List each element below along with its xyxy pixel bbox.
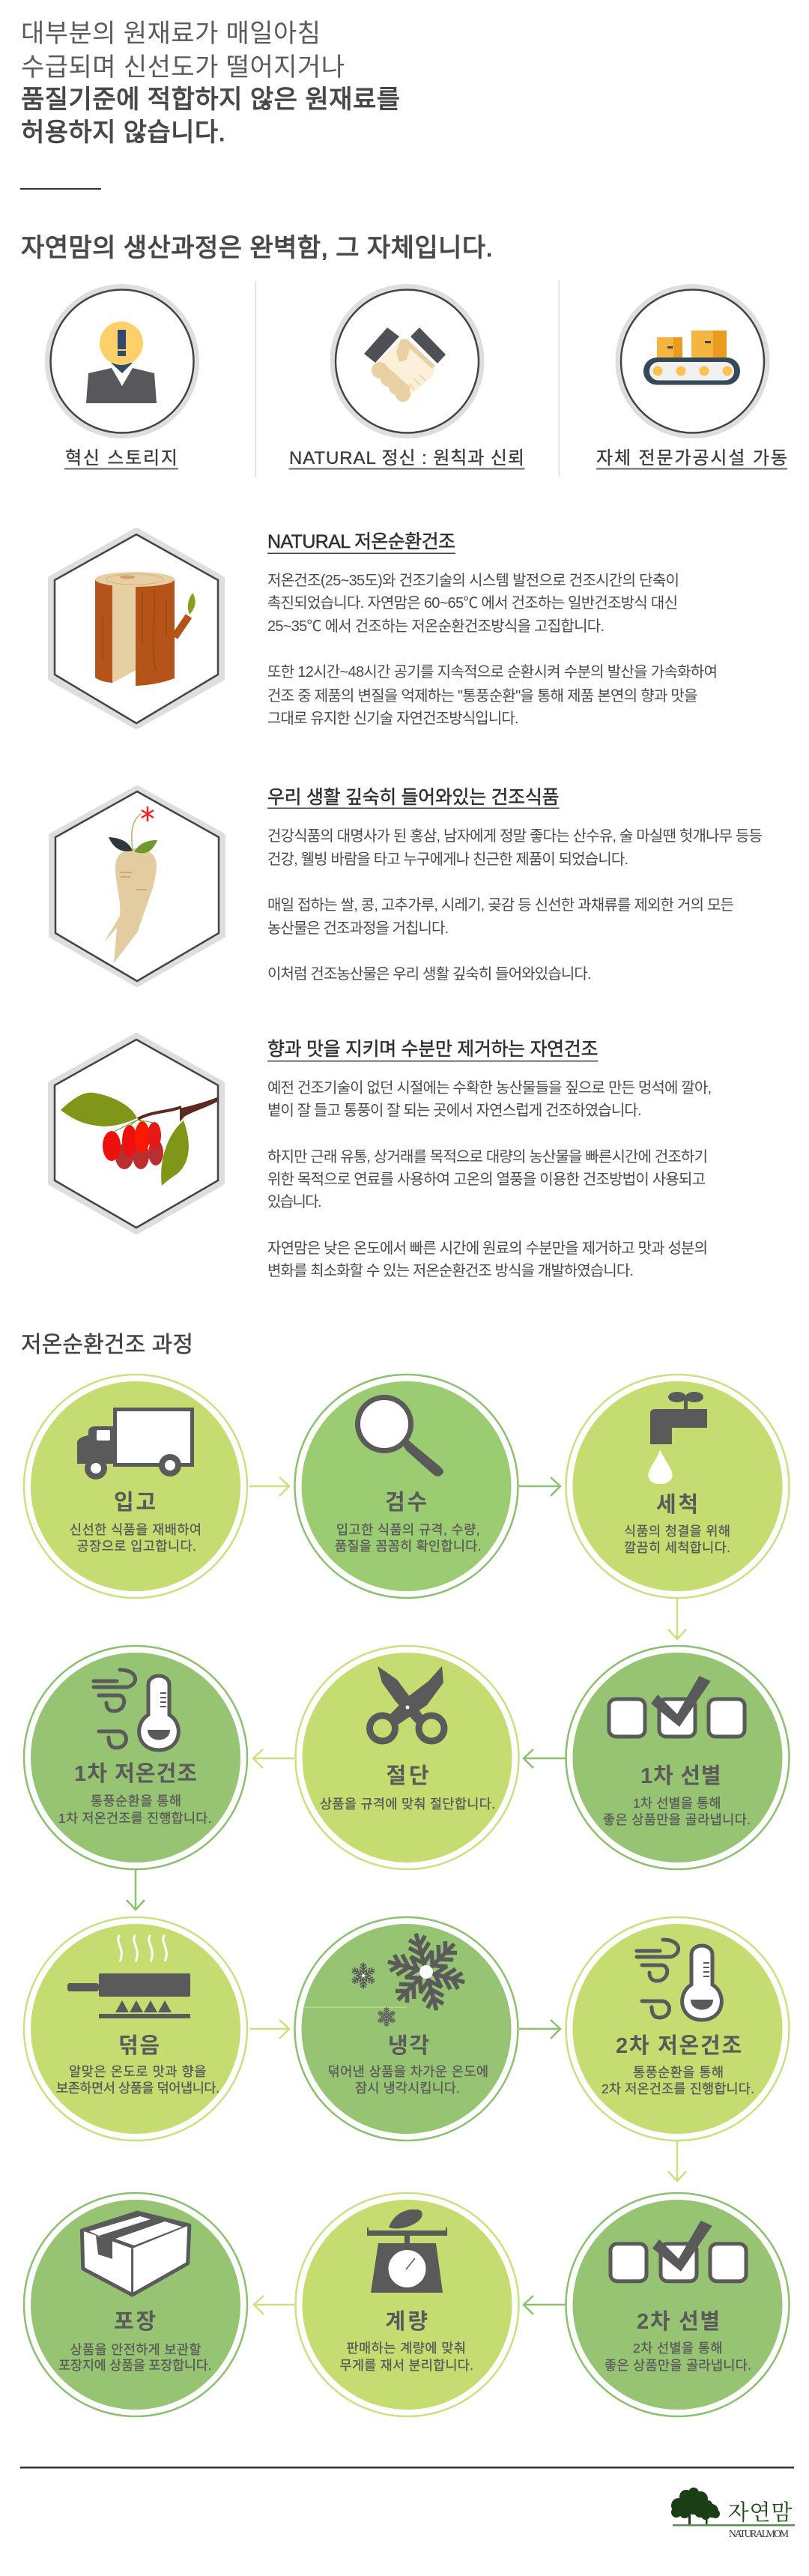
step: weighing: 계량 — [385, 2309, 428, 2334]
arrow — [127, 1870, 145, 1910]
body text: 건강식품의 대명사가 된 홍삼, 남자에게 정말 좋다는 산수유, 술 마실땐 헛개나무 등등 — [267, 827, 763, 845]
body text: 촉진되었습니다. 자연맘은 60~65℃ 에서 건조하는 일반건조방식 대신 — [267, 594, 678, 612]
step: packaging: 포장 — [114, 2309, 156, 2334]
body text: 위한 목적으로 연료를 사용하여 고온의 열풍을 이용한 건조방법이 사용되고 — [267, 1171, 706, 1188]
step: first low temp drying — [24, 1646, 247, 1869]
step: second low temp drying: 2차 저온건조 — [616, 2033, 742, 2058]
body text: 저온건조(25~35도)와 건조기술의 시스템 발전으로 건조시간의 단축이 — [267, 572, 679, 589]
step: washing: 세척 — [656, 1492, 698, 1517]
icon: snowflakes — [350, 1923, 475, 2027]
arrow — [668, 1599, 686, 1639]
label: own facility: 자체 전문가공시설 가동 — [596, 448, 787, 468]
body text: 예전 건조기술이 없던 시절에는 수확한 농산물들을 짚으로 만든 멍석에 깔아, — [267, 1079, 712, 1097]
body text: 하지만 근래 유통, 상거래를 목적으로 대량의 농산물을 빠른시간에 건조하기 — [267, 1148, 708, 1165]
icon: ginseng hexagon — [52, 788, 222, 984]
step: first selection: 1차 선별을 통해 — [633, 1796, 721, 1811]
step: cooling: 잠시 냉각시킵니다. — [355, 2081, 460, 2096]
step: second selection: 좋은 상품만을 골라냅니다. — [605, 2358, 751, 2373]
step: second low temp drying — [566, 1917, 790, 2141]
label: natural spirit: NATURAL 정신 : 원칙과 신뢰 — [289, 448, 524, 468]
step: packaging — [24, 2193, 247, 2416]
step: first low temp drying: 통풍순환을 통해 — [91, 1794, 181, 1809]
step: packaging: 포장지에 상품을 포장합니다. — [58, 2358, 211, 2373]
step: first selection — [566, 1646, 790, 1869]
step: roasting: 알맞은 온도로 맛과 향을 — [69, 2064, 207, 2079]
step: roasting: 보존하면서 상품을 덖어냅니다. — [56, 2081, 219, 2096]
body text: 볕이 잘 들고 통풍이 잘 되는 곳에서 자연스럽게 건조하였습니다. — [267, 1102, 641, 1119]
heading: production: 자연맘의 생산과정은 완벽함, 그 자체입니다. — [21, 234, 493, 262]
icon: box — [82, 2212, 190, 2295]
body text — [267, 827, 763, 983]
icon: log hexagon — [51, 531, 222, 726]
step: roasting: 덖음 — [118, 2033, 160, 2058]
body text: 농산물은 건조과정을 거칩니다. — [267, 920, 449, 937]
step: cutting: 상품을 규격에 맞춰 절단합니다. — [320, 1797, 495, 1812]
body text: 매일 접하는 쌀, 콩, 고추가루, 시레기, 곶감 등 신선한 과채류를 제외한 거의 모든 — [267, 896, 734, 914]
step: washing: 깔끔히 세척합니다. — [624, 1540, 730, 1555]
arrow — [519, 2020, 560, 2039]
intro text: 수급되며 신선도가 떨어지거나 — [21, 53, 345, 82]
body text: 변화를 최소화할 수 있는 저온순환건조 방식을 개발하였습니다. — [267, 1262, 634, 1279]
icon: conveyor belt — [643, 331, 740, 385]
step: inspection: 입고한 식품의 규격, 수량, — [336, 1522, 479, 1537]
body text: 건조 중 제품의 변질을 억제하는 "통풍순환"을 통해 제품 본연의 향과 맛을 — [267, 687, 698, 705]
body text: 이처럼 건조농산물은 우리 생활 깊숙히 들어와있습니다. — [267, 965, 592, 983]
step: cooling: 냉각 — [388, 2033, 429, 2058]
panel: own facility — [596, 286, 787, 469]
icon: scissors — [370, 1666, 444, 1741]
step: washing: 식품의 청결을 위해 — [624, 1524, 730, 1539]
step: weighing — [295, 2193, 518, 2416]
arrow — [524, 1749, 566, 1768]
intro text: 대부분의 원재료가 매일아침 — [21, 19, 321, 48]
step: inspection: 품질을 꼼꼼히 확인합니다. — [335, 1539, 481, 1554]
logo: naturalmom — [671, 2488, 795, 2539]
body text: 25~35℃ 에서 건조하는 저온순환건조방식을 고집합니다. — [267, 618, 605, 635]
body text: 그대로 유지한 신기술 자연건조방식입니다. — [267, 710, 518, 727]
icon: checkboxes — [609, 1676, 745, 1737]
arrow — [253, 1749, 294, 1768]
label: innovation storage: 혁신 스토리지 — [65, 448, 178, 468]
arrow — [668, 2141, 686, 2181]
body text — [267, 1079, 712, 1279]
icon: berries hexagon — [51, 1036, 222, 1231]
icon: kitchen scale — [367, 2209, 447, 2293]
body text: 자연맘은 낮은 온도에서 빠른 시간에 원료의 수분만을 제거하고 맛과 성분의 — [267, 1240, 708, 1257]
logo: naturalmom: 자연맘 — [728, 2500, 793, 2525]
body text: 또한 12시간~48시간 공기를 지속적으로 순환시켜 수분의 발산을 가속화하여 — [267, 663, 718, 681]
intro text: 허용하지 않습니다. — [21, 118, 225, 147]
step: second low temp drying: 2차 저온건조를 진행합니다. — [602, 2081, 754, 2096]
step: packaging: 상품을 안전하게 보관할 — [70, 2342, 201, 2357]
arrow — [519, 1477, 560, 1496]
arrow — [254, 2296, 294, 2314]
panel: keep flavour natural drying — [267, 1039, 712, 1279]
icon: truck — [77, 1409, 192, 1479]
icon: checkboxes — [610, 2221, 746, 2281]
step: weighing: 판매하는 계량에 맞춰 — [346, 2341, 466, 2356]
heading: 우리 생활 깊숙히 들어와있는 건조식품 — [267, 787, 559, 808]
step: first low temp drying: 1차 저온건조 — [74, 1761, 197, 1786]
heading: process: 저온순환건조 과정 — [21, 1333, 193, 1357]
arrow — [249, 1477, 289, 1496]
step: roasting — [24, 1917, 247, 2141]
step: inspection: 검수 — [385, 1490, 427, 1515]
step: second selection — [566, 2193, 790, 2416]
icon: pan on burner — [67, 1935, 190, 2018]
step: second selection: 2차 선별 — [637, 2309, 720, 2334]
step: cooling: 덖어낸 상품을 차가운 온도에 — [328, 2064, 488, 2079]
panel: dried foods in our life — [267, 787, 763, 983]
heading: NATURAL 저온순환건조 — [267, 531, 455, 552]
step: cutting — [295, 1646, 518, 1869]
icon: wind and thermometer — [94, 1670, 178, 1750]
step: first selection: 좋은 상품만을 골라냅니다. — [603, 1812, 751, 1827]
step: second selection: 2차 선별을 통해 — [633, 2341, 722, 2356]
icon: tree — [671, 2488, 720, 2526]
step: weighing: 무게를 재서 분리합니다. — [340, 2358, 473, 2373]
step: washing — [566, 1375, 790, 1598]
icon: handshake — [364, 328, 446, 402]
step: receiving: 입고 — [114, 1490, 156, 1515]
step: receiving: 공장으로 입고합니다. — [76, 1539, 196, 1554]
panel: innovation storage — [48, 286, 196, 469]
icon: wind and thermometer — [637, 1940, 721, 2020]
step: inspection — [295, 1375, 518, 1598]
arrow — [524, 2296, 566, 2314]
step: receiving — [24, 1375, 247, 1598]
panel: natural spirit — [289, 286, 524, 469]
arrow — [249, 2020, 289, 2039]
body text: 있습니다. — [267, 1193, 322, 1210]
intro text — [21, 19, 400, 147]
step: cooling — [295, 1917, 518, 2141]
icon: magnifier — [358, 1397, 442, 1475]
body text — [267, 572, 718, 727]
heading: 향과 맛을 지키며 수분만 제거하는 자연건조 — [267, 1039, 598, 1060]
logo: naturalmom: NATURALMOM — [729, 2528, 789, 2539]
step: first low temp drying: 1차 저온건조를 진행합니다. — [58, 1811, 211, 1826]
step: cutting: 절단 — [387, 1764, 428, 1788]
step: first selection: 1차 선별 — [640, 1764, 721, 1788]
step: receiving: 신선한 식품을 재배하여 — [70, 1522, 202, 1537]
icon: faucet — [649, 1392, 707, 1484]
panel: natural low temperature circulation drying — [267, 531, 718, 727]
body text: 건강, 웰빙 바람을 타고 누구에게나 친근한 제품이 되었습니다. — [267, 851, 628, 868]
icon: person with bulb head — [86, 322, 157, 403]
intro text: 품질기준에 적합하지 않은 원재료를 — [21, 85, 400, 114]
step: second low temp drying: 통풍순환을 통해 — [633, 2065, 724, 2080]
